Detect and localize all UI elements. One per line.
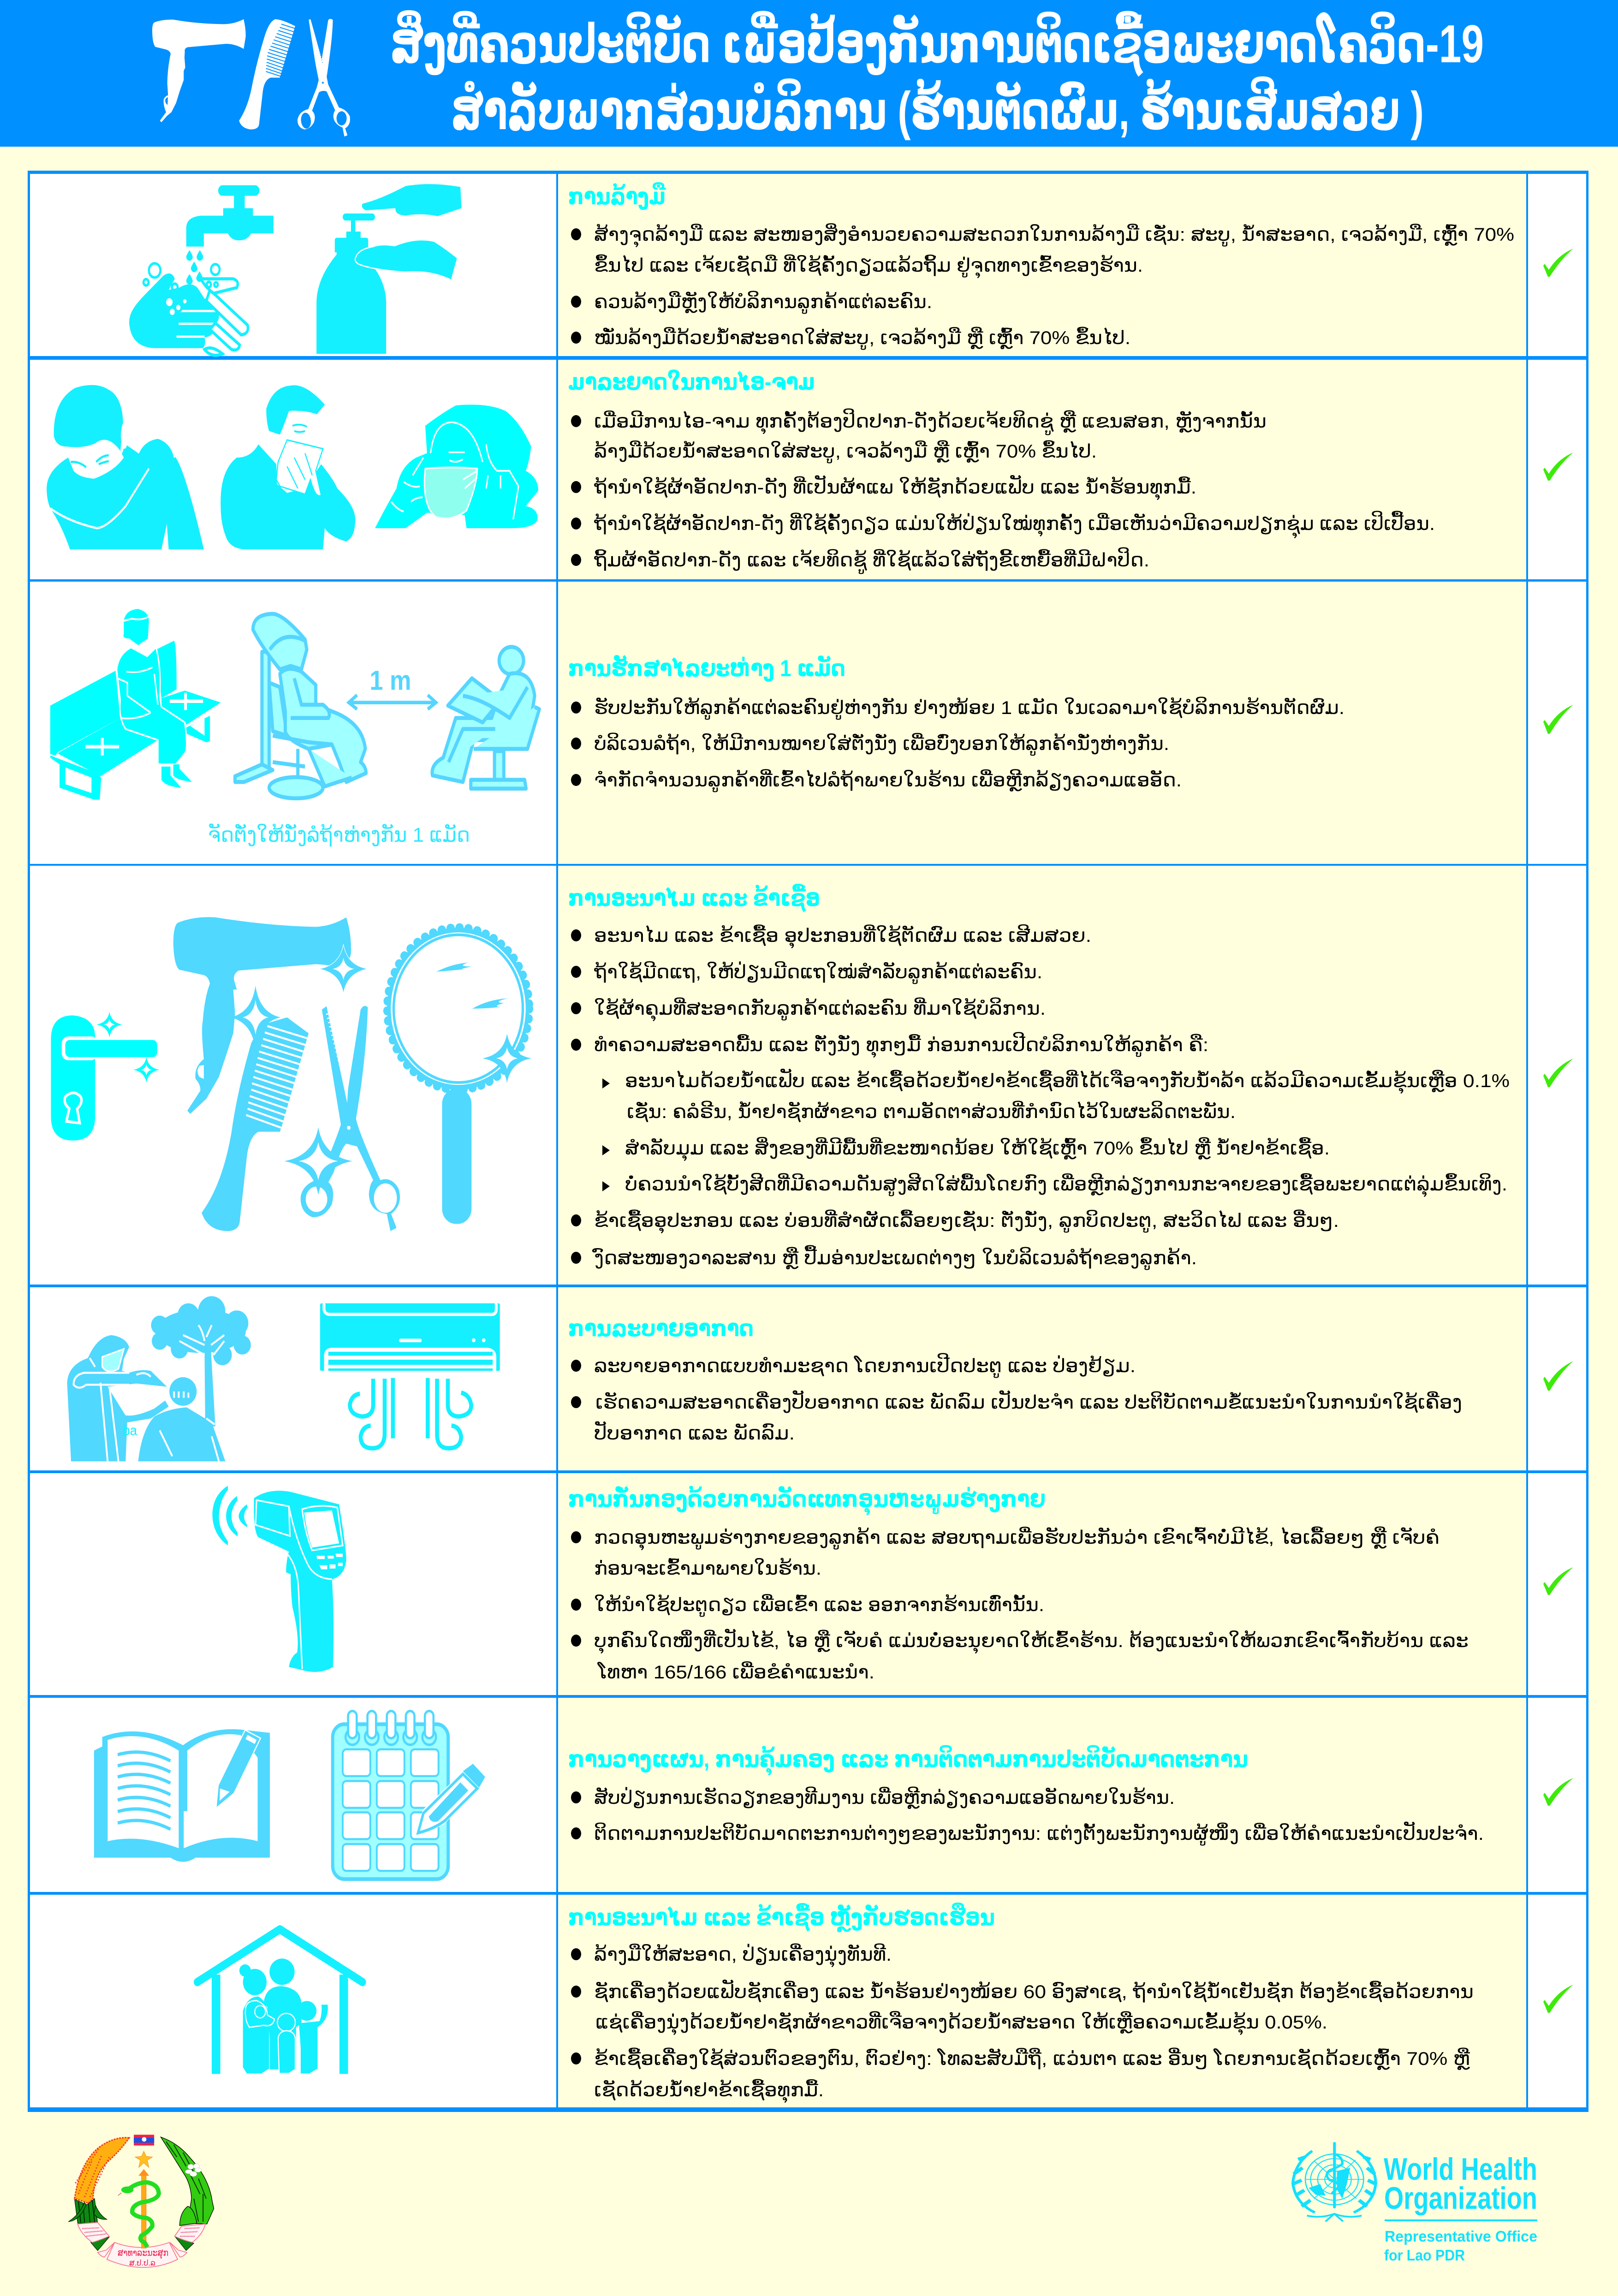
text block: planning points: ສັບປ່ຽນການເຮັດວຽກຂອງທີມງານ ເພື່ອຫຼີກລ່ຽງຄວາມແອອັດພາຍໃນຮ້ານ. [594,1786,1175,1809]
panel: planning and monitoring [94,1711,1573,1879]
text block: cleaning points: ໃຊ້ຜ້າຄຸມທີ່ສະອາດກັບລູກຄ້າແຕ່ລະຄົນ ທີ່ມາໃຊ້ບໍລິການ. [594,997,1046,1021]
icon: check mark [1543,1985,1573,2013]
text block: home cleaning points: ແຊ່ເຄື່ອງນຸ່ງດ້ວຍນ້ຳຢາຊັກຜ້າຂາວທີ່ເຈືອຈາງດ້ວຍນ້ຳສະອາດ ໃຫ້ເຫຼືອຄວາມເຂັ້ມຂຸ້ນ 0.05%. [595,2010,1327,2035]
text: WHO name: Representative Office [1385,2228,1537,2245]
icon: barber under tree: ba [123,1422,137,1439]
text block: distance points: ຮັບປະກັນໃຫ້ລູກຄ້າແຕ່ລະຄົນຢູ່ຫ່າງກັນ ຢ່າງໜ້ອຍ 1 ແມັດ ໃນເວລາມາໃຊ້ບໍລິການຮ້ານຕັດຜົມ. [594,696,1344,720]
text: WHO name: for Lao PDR [1384,2247,1465,2264]
icon: WHO emblem [1293,2143,1376,2221]
text block: screening points [571,1526,1469,1683]
icon: check mark [1543,1361,1573,1391]
arrow: 1 metre distance [349,666,436,709]
text block: screening points: ກ່ອນຈະເຂົ້າມາພາຍໃນຮ້ານ. [594,1558,821,1579]
heading: ມາລະຍາດໃນການໄອ-ຈາມ [568,369,815,395]
icon: comb [202,1017,310,1231]
text: WHO name [1384,2152,1537,2264]
text block: hand washing points: ໝັ່ນລ້າງມືດ້ວຍນ້ຳສະອາດໃສ່ສະບູ, ເຈວລ້າງມື ຫຼື ເຫຼົ້າ 70% ຂຶ້ນໄປ. [594,326,1130,350]
text block: home cleaning points: ເຊັດດ້ວຍນ້ຳຢາຂ້າເຊື້ອທຸກມື້. [594,2079,824,2103]
text: WHO name: World Health [1384,2152,1537,2187]
caption: ຈັດຕັ່ງໃຫ້ນັ່ງລໍຖ້າຫ່າງກັນ 1 ແມັດ [208,822,470,846]
text block: home cleaning points: ລ້າງມືໃຫ້ສະອາດ, ປ່ຽນເຄື່ອງນຸ່ງທັນທີ. [594,1943,892,1967]
heading: ການລ້າງມື [568,182,666,210]
text block: home cleaning points [571,1943,1474,2103]
text block: hand washing points: ຄວນລ້າງມືຫຼັງໃຫ້ບໍລິການລູກຄ້າແຕ່ລະຄົນ. [594,291,932,314]
icon: customer reading while waiting [432,647,539,789]
text block: ventilation points: ປັບອາກາດ ແລະ ພັດລົມ. [594,1421,795,1444]
text block: hand washing points [571,223,1514,350]
text block: distance points: ຈຳກັດຈຳນວນລູກຄ້າທີ່ເຂົ້າໄປລໍຖ້າພາຍໃນຮ້ານ ເພື່ອຫຼີກລ້ຽງຄວາມແອອັດ. [594,768,1182,792]
text: WHO name: Organization [1384,2181,1537,2216]
icon: barber under tree [67,1296,251,1461]
text block: screening points: ໃຫ້ນຳໃຊ້ປະຕູດຽວ ເພື່ອເຂົ້າ ແລະ ອອກຈາກຮ້ານເທົ່ານັ້ນ. [594,1594,1044,1617]
text block: cleaning points: ອະນາໄມ ແລະ ຂ້າເຊື້ອ ອຸປະກອນທີ່ໃຊ້ຕັດຜົມ ແລະ ເສີມສວຍ. [594,924,1091,948]
icon: customer under hood dryer [235,614,366,798]
icon: door handle [51,1012,159,1141]
text block: ventilation points: ເຮັດຄວາມສະອາດເຄື່ອງປັບອາກາດ ແລະ ພັດລົມ ເປັນປະຈຳ ແລະ ປະຕິບັດຕາມຂໍ້ແນະນຳໃນການນຳໃຊ້ເຄື່ອງ [595,1390,1462,1413]
panel: cough etiquette [47,369,1573,574]
text block: distance points [571,696,1344,792]
header banner [0,0,1618,147]
text block: cough etiquette points: ເມື່ອມີການໄອ-ຈາມ ທຸກຄັ້ງຕ້ອງປິດປາກ-ດັງດ້ວຍເຈ້ຍທິດຊູ່ ຫຼື ແຂນສອກ, ຫຼັງຈາກນັ້ນ [594,408,1267,435]
text block: cleaning points: ງົດສະໜອງວາລະສານ ຫຼື ປື້ມອ່ານປະເພດຕ່າງໆ ໃນບໍລິເວນລໍຖ້າຂອງລູກຄ້າ. [592,1244,1197,1270]
logo: Lao Ministry of Health emblem [68,2135,214,2267]
text block: planning points: ຕິດຕາມການປະຕິບັດມາດຕະການຕ່າງໆຂອງພະນັກງານ: ແຕ່ງຕັ້ງພະນັກງານຜູ້ໜຶ່ງ ເພື່ອໃຫ້ຄຳແນະນຳເປັນປະຈຳ. [594,1821,1484,1846]
text block: home cleaning points: ຊັກເຄື່ອງດ້ວຍແຟັບຊັກເຄື່ອງ ແລະ ນ້ຳຮ້ອນຢ່າງໜ້ອຍ 60 ອົງສາເຊ, ຖ້ານຳໃຊ້ນ້ຳເຢັນຊັກ ຕ້ອງຂ້າເຊື້ອດ້ວຍການ [594,1979,1474,2003]
panel: hand washing [129,182,1573,355]
title [390,10,1484,141]
heading: ການອະນາໄມ ແລະ ຂ້າເຊື້ອ [568,883,820,912]
text block: cleaning points: ເຊັ່ນ: ຄລໍຣີນ, ນ້ຳຢາຊັກຜ້າຂາວ ຕາມອັດຕາສ່ວນທີ່ກຳນົດໄວ້ໃນຜະລິດຕະພັນ. [627,1100,1236,1123]
icon: header hair dryer, comb and scissors [152,19,350,137]
icon: infrared thermometer [213,1486,346,1672]
icon: scissors [301,1006,400,1231]
text block: ventilation points [571,1352,1462,1444]
text block: cleaning points: ທຳຄວາມສະອາດພື້ນ ແລະ ຕັ່ງນັ່ງ ທຸກໆມື້ ກ່ອນການເປີດບໍລິການໃຫ້ລູກຄ້າ ຄື: [594,1031,1208,1058]
heading: ການກັ່ນກອງດ້ວຍການວັດແທກອຸນຫະພູມຮ່າງກາຍ [568,1486,1046,1516]
icon: soap pump bottle with hands [316,184,462,354]
text block: cleaning points: ຖ້າໃຊ້ມີດແຖ, ໃຫ້ປ່ຽນມີດແຖໃໝ່ສຳລັບລູກຄ້າແຕ່ລະຄົນ. [594,961,1042,984]
text block: cough etiquette points: ຖິ້ມຜ້າອັດປາກ-ດັງ ແລະ ເຈ້ຍທິດຊູ້ ທີ່ໃຊ້ແລ້ວໃສ່ຖັງຂີ້ເຫຍື້ອທີ່ມີຝາປິດ. [594,547,1149,574]
heading: ການວາງແຜນ, ການຄຸ້ມຄອງ ແລະ ການຕິດຕາມການປະຕິບັດມາດຕະການ [568,1745,1248,1776]
icon: sparkles on tools [230,944,531,1195]
text block: cleaning points: ສຳລັບມຸມ ແລະ ສິ່ງຂອງທີ່ມີພື້ນທີ່ຂະໜາດນ້ອຍ ໃຫ້ໃຊ້ເຫຼົ້າ 70% ຂຶ້ນໄປ ຫຼື ນ້ຳຢາຂ້າເຊື້ອ. [625,1136,1330,1161]
text block: screening points: ບຸກຄົນໃດໜຶ່ງທີ່ເປັນໄຂ້, ໄອ ຫຼື ເຈັບຄໍ ແມ່ນບໍ່ອະນຸຍາດໃຫ້ເຂົ້າຮ້ານ. ຕ້ອງແນະນຳໃຫ້ພວກເຂົາເຈົ້າກັບບ້ານ ແລະ [594,1628,1469,1654]
icon: open book with pencil [94,1729,270,1862]
arrow: 1 metre distance: 1 m [369,666,411,696]
text block: cough etiquette points: ລ້າງມືດ້ວຍນ້ຳສະອາດໃສ່ສະບູ, ເຈວລ້າງມື ຫຼື ເຫຼົ້າ 70% ຂຶ້ນໄປ. [594,440,1097,464]
panel: cleaning at home [197,1902,1573,2103]
text block: cough etiquette points: ຖ້ານຳໃຊ້ຜ້າອັດປາກ-ດັງ ທີ່ເປັນຜ້າແພ ໃຫ້ຊັກດ້ວຍແຟັບ ແລະ ນ້ຳຮ້ອນທຸກມື້. [594,474,1196,500]
heading: ການຮັກສາໄລຍະຫ່າງ 1 ແມັດ [568,655,845,682]
logo: Lao Ministry of Health emblem: ສ.ປ.ປ.ລ [129,2259,155,2267]
panel: ventilation [67,1296,1573,1461]
text block: cleaning points [571,924,1510,1270]
logo: Lao Ministry of Health emblem: ສາທາລະນະສຸກ [118,2248,168,2259]
text block: ventilation points: ລະບາຍອາກາດແບບທຳມະຊາດ ໂດຍການເປີດປະຕູ ແລະ ປ່ອງຢ້ຽມ. [594,1352,1136,1378]
icon: person coughing into elbow [47,385,204,549]
panel: cleaning and disinfection [51,883,1573,1270]
panel: keeping 1 metre distance [50,609,1573,846]
text block: hand washing points: ຂຶ້ນໄປ ແລະ ເຈ້ຍເຊັດມື ທີ່ໃຊ້ຄັ້ງດຽວແລ້ວຖິ້ມ ຢູ່ຈຸດທາງເຂົ້າຂອງຮ້ານ. [594,254,1143,278]
text block: screening points: ໂທຫາ 165/166 ເພື່ອຂໍຄຳແນະນຳ. [597,1661,874,1683]
icon: check mark [1543,249,1573,277]
panel: temperature screening [213,1486,1573,1683]
text block: planning points [571,1786,1484,1846]
icon: check mark [1543,452,1573,481]
icon: check mark [1543,1778,1573,1806]
icon: family in house [197,1929,363,2074]
text block: cleaning points: ບໍ່ຄວນນຳໃຊ້ບັ້ງສີດທີ່ມີຄວາມດັນສູງສີດໃສ່ພື້ນໂດຍກົງ ເພື່ອຫຼີກລ່ຽງການກະຈາຍຂອງເຊື້ອພະຍາດແຕ່ລຸ່ມຂຶ້ນເທິງ. [625,1172,1507,1197]
text block: hand washing points: ສ້າງຈຸດລ້າງມື ແລະ ສະໜອງສິ່ງອຳນວຍຄວາມສະດວກໃນການລ້າງມື ເຊັ່ນ: ສະບູ, ນ້ຳສະອາດ, ເຈວລ້າງມື, ເຫຼົ້າ 70% [594,223,1514,247]
icon: person sneezing into tissue [220,385,355,549]
icon: woman on bench [50,609,220,800]
heading: ການອະນາໄມ ແລະ ຂ້າເຊື້ອ ຫຼັງກັບຮອດເຮືອນ [568,1902,995,1933]
text block: cough etiquette points: ຖ້ານຳໃຊ້ຜ້າອັດປາກ-ດັງ ທີ່ໃຊ້ຄັ້ງດຽວ ແມ່ນໃຫ້ປ່ຽນໃໝ່ທຸກຄັ້ງ ເມື່ອເຫັນວ່າມີຄວາມປຽກຊຸ່ມ ແລະ ເປິເປື້ອນ. [594,510,1435,538]
icon: calendar with pencil [333,1711,488,1879]
text block: cleaning points: ອະນາໄມດ້ວຍນ້ຳແຟັບ ແລະ ຂ້າເຊື້ອດ້ວຍນ້ຳຢາຂ້າເຊື້ອທີ່ໄດ້ເຈືອຈາງກັບນ້ຳລ້າ ແລ້ວມີຄວາມເຂັ້ມຂຸ້ນເຫຼືອ 0.1% [625,1068,1510,1094]
icon: check mark [1543,1567,1573,1595]
icon: check mark [1543,705,1573,734]
icon: hair dryer [173,917,351,1114]
logo: World Health Organization [1293,2143,1537,2264]
text block: distance points: ບໍລິເວນລໍຖ້າ, ໃຫ້ມີການໝາຍໃສ່ຕັ່ງນັ່ງ ເພື່ອບົ່ງບອກໃຫ້ລູກຄ້ານັ່ງຫ່າງກັນ. [594,732,1169,756]
heading: ການລະບາຍອາກາດ [568,1315,754,1341]
text block: cough etiquette points [571,408,1435,574]
icon: woman putting on mask [375,404,538,528]
text block: cleaning points: ຂ້າເຊື້ອອຸປະກອນ ແລະ ບ່ອນທີ່ສຳຜັດເລື້ອຍໆເຊັ່ນ: ຕັ່ງນັ່ງ, ລູກບິດປະຕູ, ສະວິດໄຟ ແລະ ອື່ນໆ. [594,1209,1339,1233]
icon: faucet and washing hands [129,185,274,355]
icon: air conditioner [320,1303,500,1448]
icon: hand mirror [387,928,529,1224]
icon: check mark [1543,1059,1573,1087]
text block: screening points: ກວດອຸນຫະພູມຮ່າງກາຍຂອງລູກຄ້າ ແລະ ສອບຖາມເພື່ອຮັບປະກັນວ່າ ເຂົາເຈົ້າບໍ່ມີໄຂ້, ໄອເລື້ອຍໆ ຫຼື ເຈັບຄໍ [594,1526,1440,1550]
text block: home cleaning points: ຂ້າເຊື້ອເຄື່ອງໃຊ້ສ່ວນຕົວຂອງຕົນ, ຕົວຢ່າງ: ໂທລະສັບມືຖື, ແວ່ນຕາ ແລະ ອື່ນໆ ໂດຍການເຊັດດ້ວຍເຫຼົ້າ 70% ຫຼື [594,2047,1470,2070]
